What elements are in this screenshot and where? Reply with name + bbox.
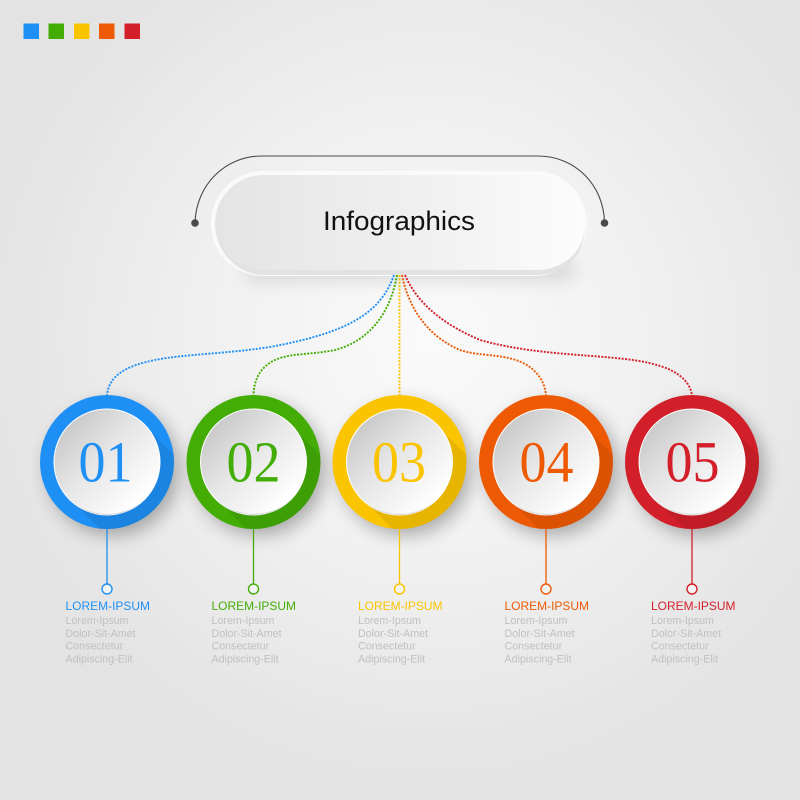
caption 02: LOREM-IPSUM: [212, 599, 296, 613]
title text: Infographics: [323, 206, 475, 236]
caption 03: [358, 599, 442, 666]
caption 04: [504, 599, 589, 666]
caption 03: Consectetur: [358, 641, 416, 653]
dotted connector: 04: [402, 275, 546, 395]
disc 05: [638, 408, 746, 516]
number 02: 02: [226, 430, 280, 494]
caption 05: Dolor-Sit-Amet: [651, 628, 721, 640]
stem and node 02: [248, 529, 258, 594]
caption 04: LOREM-IPSUM: [504, 599, 589, 613]
caption 01: Lorem-Ipsum: [66, 615, 129, 627]
stem and node 05: [687, 529, 697, 594]
disc 01: [54, 408, 160, 516]
caption 01: Consectetur: [66, 641, 124, 653]
ring 04: [479, 395, 613, 529]
disc 04: [492, 408, 600, 516]
ring 01: [40, 395, 174, 529]
caption 04: Dolor-Sit-Amet: [504, 628, 575, 640]
disc 02: [200, 408, 307, 516]
dotted connector: 05: [405, 275, 692, 395]
caption 01: [66, 599, 150, 666]
step 04: [476, 393, 627, 595]
caption 03: Lorem-Ipsum: [358, 615, 421, 627]
caption 02: Dolor-Sit-Amet: [212, 628, 282, 640]
step 01: [37, 393, 188, 595]
dotted connector: 01: [107, 275, 394, 395]
header arc with end dots: [191, 156, 608, 227]
number 05: 05: [666, 430, 720, 494]
disc 03: [346, 408, 453, 516]
colour swatches: [24, 24, 140, 39]
caption 02: Consectetur: [212, 641, 270, 653]
caption 04: Lorem-Ipsum: [504, 615, 568, 627]
stem and node 01: [102, 529, 112, 594]
ring 05: [625, 395, 759, 529]
step 05: [622, 393, 774, 595]
caption 01: Adipiscing-Elit: [66, 654, 133, 666]
caption 01: LOREM-IPSUM: [66, 599, 150, 613]
caption 03: LOREM-IPSUM: [358, 599, 442, 613]
caption 05: [651, 599, 736, 666]
number 03: 03: [372, 430, 426, 494]
caption 01: Dolor-Sit-Amet: [66, 628, 136, 640]
stem and node 03: [394, 529, 404, 594]
dotted connector: 02: [254, 275, 397, 395]
caption 05: Consectetur: [651, 641, 709, 653]
caption 04: Consectetur: [504, 641, 563, 653]
dotted connector: 03: [398, 275, 400, 395]
caption 03: Adipiscing-Elit: [358, 654, 425, 666]
caption 05: LOREM-IPSUM: [651, 599, 736, 613]
ring 03: [332, 395, 466, 529]
caption 05: Lorem-Ipsum: [651, 615, 714, 627]
step 03: [330, 393, 480, 595]
caption 02: Adipiscing-Elit: [212, 654, 279, 666]
caption 04: Adipiscing-Elit: [504, 654, 572, 666]
step 02: [184, 393, 334, 595]
number 01: 01: [78, 430, 132, 494]
title pill: [211, 171, 587, 280]
number 04: 04: [520, 430, 574, 494]
caption 03: Dolor-Sit-Amet: [358, 628, 428, 640]
ring 02: [186, 395, 320, 529]
caption 02: Lorem-Ipsum: [212, 615, 275, 627]
caption 02: [212, 599, 296, 666]
stem and node 04: [541, 529, 551, 594]
caption 05: Adipiscing-Elit: [651, 654, 718, 666]
